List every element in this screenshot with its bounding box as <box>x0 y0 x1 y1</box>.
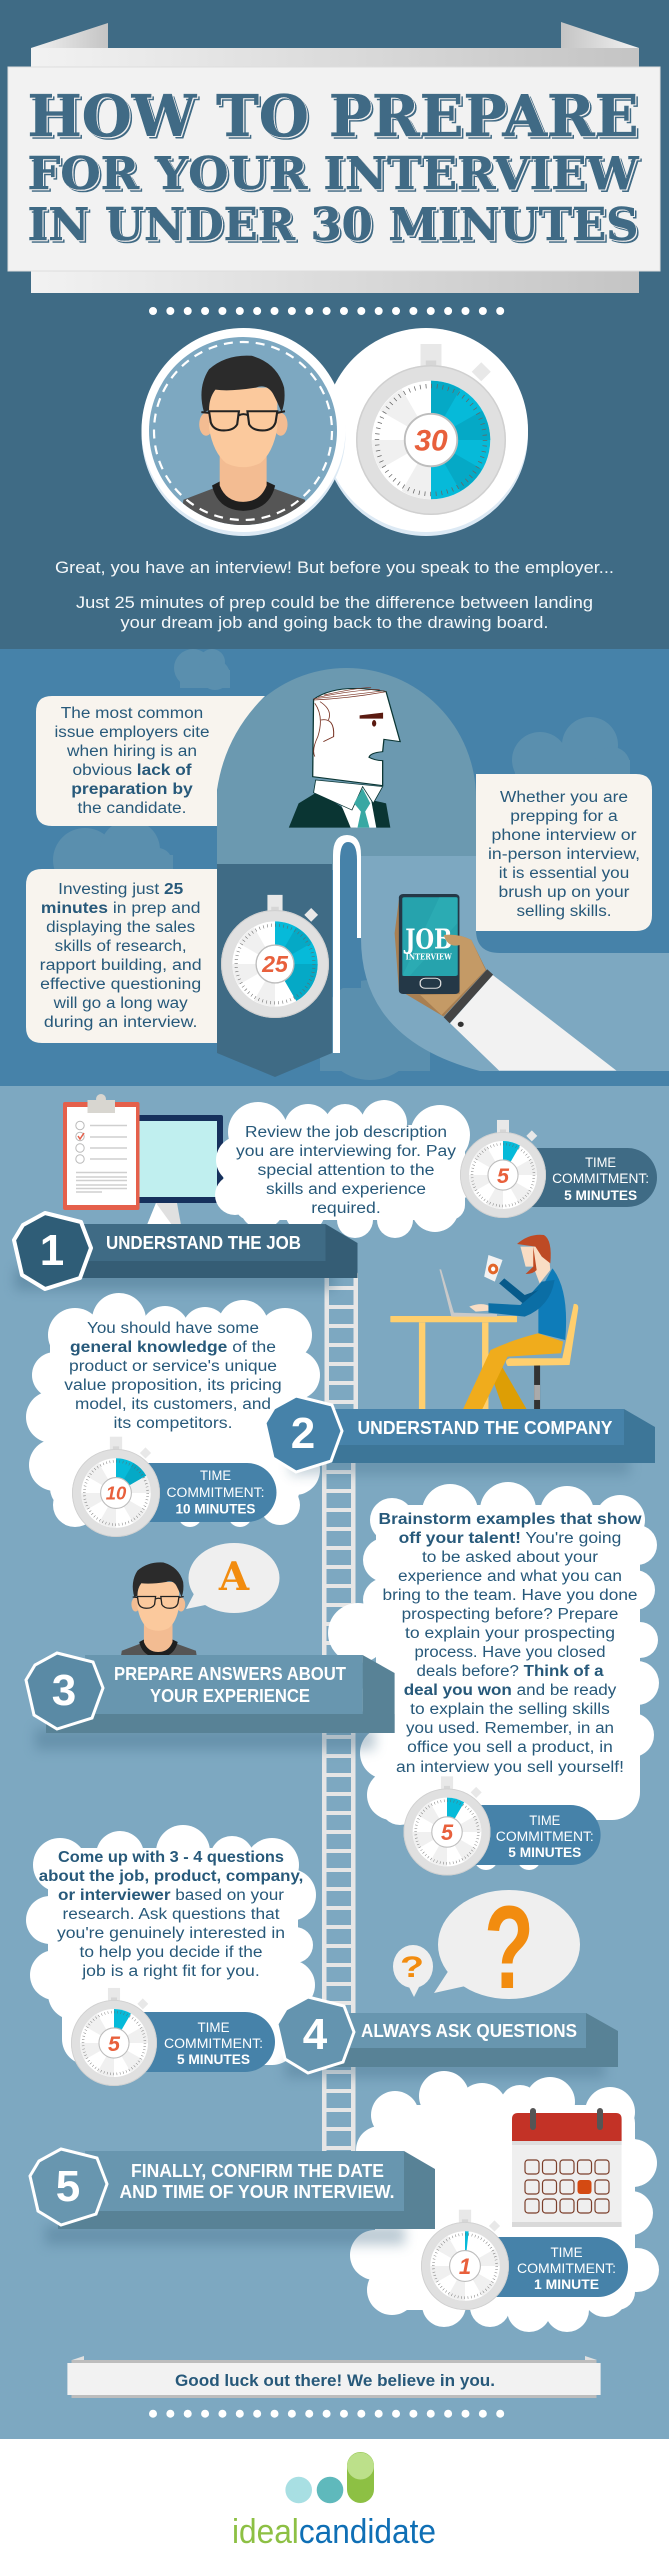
step 4 badge: 4 <box>303 2010 328 2059</box>
step 4 heading bar <box>277 1997 618 2078</box>
stopwatch: 5, step 3: 5 <box>441 1820 454 1845</box>
time pill: 5 minutes, step 1 <box>500 1148 657 1207</box>
step 2 badge: 2 <box>291 1409 315 1458</box>
text box: investing 25 minutes: skills of research, <box>55 938 187 955</box>
title banner <box>8 22 660 293</box>
text box: lack of preparation: obvious lack of <box>72 762 192 779</box>
step 1 badge: 1 <box>40 1226 64 1275</box>
top section background <box>0 0 669 649</box>
step 2 badge <box>265 1396 342 1472</box>
stopwatch: 10: 10 <box>106 1483 127 1504</box>
stopwatch: 30 <box>356 344 506 515</box>
step 3 description: an interview you sell yourself! <box>396 1759 624 1776</box>
step 4 description: about the job, product, company, <box>39 1868 303 1885</box>
stopwatch: 10 <box>72 1437 160 1537</box>
step 3 description: to explain the selling skills <box>410 1701 610 1718</box>
step 1 heading bar: UNDERSTAND THE JOB <box>106 1232 301 1253</box>
arch slot <box>333 835 361 1053</box>
step 2 description: You should have some <box>87 1320 259 1337</box>
intro text: Just 25 minutes of prep could be the difference between landing <box>76 593 593 612</box>
step 1 description: special attention to the <box>258 1162 434 1179</box>
icon: interviewer <box>289 687 400 828</box>
time pill: 10 minutes: 10 MINUTES <box>176 1502 256 1516</box>
icon: question speech bubbles: ? <box>400 1951 424 1984</box>
step 3 badge: 3 <box>52 1666 76 1715</box>
time pill: 5 minutes, step 3 <box>447 1805 601 1865</box>
portrait badge <box>142 328 346 536</box>
text box: lack of preparation <box>36 696 265 826</box>
middle section background <box>0 649 669 1086</box>
stopwatch: 5, step 4 <box>71 1988 157 2086</box>
icon: candidate answering <box>119 1543 280 1667</box>
step 4 description: you're genuinely interested in <box>57 1925 285 1942</box>
text box: selling skills <box>476 774 652 931</box>
step 3 badge <box>26 1653 103 1729</box>
logo: ideal candidate <box>232 2452 436 2551</box>
time pill: 5 minutes, step 3: COMMITMENT: <box>496 1829 594 1844</box>
dark ribbon panel <box>217 864 332 1077</box>
step 4 description: job is a right fit for you. <box>81 1963 260 1980</box>
step 3 description: to explain your prospecting <box>405 1625 615 1642</box>
step 1 description: you are interviewing for. Pay <box>236 1143 456 1160</box>
step 4 description <box>39 1849 303 1980</box>
footer background <box>0 2439 669 2561</box>
cloud: step 1 <box>215 1100 480 1238</box>
time pill: 1 minute <box>465 2237 628 2297</box>
text box: selling skills: it is essential you <box>499 865 629 882</box>
stopwatch badge: 30 minutes <box>324 328 528 536</box>
stopwatch: 5, step 4: 5 <box>108 2032 121 2056</box>
intro text <box>55 558 614 632</box>
time pill: 5 minutes, step 4: TIME <box>198 2020 230 2035</box>
time pill: 5 minutes, step 1: 5 MINUTES <box>564 1188 637 1203</box>
step 3 heading bar: YOUR EXPERIENCE <box>150 1685 310 1706</box>
time pill: 5 minutes, step 4: 5 MINUTES <box>177 2052 250 2067</box>
text box: investing 25 minutes: during an interview. <box>44 1014 197 1031</box>
step 3 description: deals before? Think of a <box>416 1663 604 1680</box>
step 3 description: prospecting before? Prepare <box>402 1606 618 1623</box>
step 4 description: or interviewer based on your <box>58 1887 284 1904</box>
ladder <box>322 1272 358 2152</box>
title text: IN UNDER 30 MINUTES <box>28 198 638 251</box>
step 3 description: to be asked about your <box>422 1549 598 1566</box>
time pill: 5 minutes, step 3: 5 MINUTES <box>508 1845 581 1860</box>
stopwatch: 25 <box>221 895 329 1018</box>
step 2 description: product or service's unique <box>69 1358 277 1375</box>
text box: investing 25 minutes: displaying the sales <box>46 919 195 936</box>
time pill: 10 minutes: TIME <box>200 1468 231 1483</box>
step 2 description: its competitors. <box>114 1415 232 1432</box>
text box: selling skills: selling skills. <box>516 903 612 920</box>
title text: HOW TO PREPARE <box>28 83 638 150</box>
title text <box>28 83 640 251</box>
step 1 description <box>236 1124 456 1217</box>
cloud: step 2 <box>26 1293 320 1527</box>
stopwatch: 30: 30 <box>414 424 448 457</box>
title text: FOR YOUR INTERVIEW <box>28 147 640 200</box>
text box: investing 25 minutes: Investing just 25 <box>58 881 184 898</box>
step 5 heading bar: FINALLY, CONFIRM THE DATE <box>131 2160 384 2181</box>
time pill: 5 minutes, step 1: COMMITMENT: <box>552 1171 649 1186</box>
closing banner: Good luck out there! We believe in you. <box>175 2372 495 2390</box>
stopwatch: 1 <box>421 2210 509 2310</box>
step 1 badge <box>14 1213 91 1289</box>
phone panel: light shape <box>361 856 669 1071</box>
text box: investing 25 minutes <box>26 869 217 1043</box>
step 3 description: process. Have you closed <box>414 1644 606 1661</box>
step 2 heading bar: UNDERSTAND THE COMPANY <box>358 1417 613 1438</box>
icon: man at desk with laptop <box>390 1235 578 1410</box>
time pill: 1 minute: 1 MINUTE <box>534 2277 599 2292</box>
step 3 description: Brainstorm examples that show <box>378 1511 643 1528</box>
job candidate portrait <box>179 356 309 526</box>
text box: investing 25 minutes: rapport building, and <box>40 957 202 974</box>
step 4 description: Come up with 3 - 4 questions <box>58 1849 284 1866</box>
step 3 description: office you sell a product, in <box>407 1739 613 1756</box>
step 2 description <box>64 1320 282 1432</box>
phone: INTERVIEW <box>406 952 452 962</box>
step 3 description: deal you won and be ready <box>404 1682 617 1699</box>
time pill: 10 minutes: COMMITMENT: <box>166 1485 264 1500</box>
text box: lack of preparation: the candidate. <box>78 800 186 817</box>
text box: selling skills: Whether you are <box>500 789 628 806</box>
step 5 heading bar <box>30 2149 435 2245</box>
step 3 description: bring to the team. Have you done <box>382 1587 638 1604</box>
text box: lack of preparation: when hiring is an <box>66 743 197 760</box>
phone <box>399 894 459 994</box>
faint background clouds <box>53 649 630 1080</box>
step 4 badge <box>277 1997 354 2073</box>
cloud: step 3 <box>328 1482 659 1870</box>
intro text: your dream job and going back to the drawing board. <box>120 613 548 632</box>
step 5 badge <box>30 2149 107 2225</box>
time pill: 5 minutes, step 3: TIME <box>529 1813 560 1828</box>
icon: question speech bubbles <box>393 1882 580 2014</box>
stopwatch: 1: 1 <box>459 2254 471 2279</box>
step 3 heading bar: PREPARE ANSWERS ABOUT <box>114 1663 347 1684</box>
step 2 description: model, its customers, and <box>75 1396 271 1413</box>
stopwatch: 5, step 1: 5 <box>497 1164 510 1188</box>
step 4 description: to help you decide if the <box>80 1944 262 1961</box>
steps section background <box>0 1086 669 2439</box>
text box: investing 25 minutes: minutes in prep and <box>41 900 200 917</box>
step 4 heading bar: ALWAYS ASK QUESTIONS <box>361 2020 577 2041</box>
stopwatch: 5, step 3 <box>404 1776 490 1876</box>
step 3 description <box>378 1511 643 1776</box>
time pill: 5 minutes, step 1: TIME <box>585 1155 616 1170</box>
text box: lack of preparation: preparation by <box>71 781 193 798</box>
time pill: 5 minutes, step 4: COMMITMENT: <box>164 2036 263 2051</box>
time pill: 10 minutes <box>116 1463 276 1522</box>
closing banner <box>67 2356 601 2398</box>
text box: selling skills: prepping for a <box>510 808 618 825</box>
icon: hand holding phone <box>395 894 616 1071</box>
text box: investing 25 minutes: effective questioning <box>40 976 201 993</box>
step 3 heading bar <box>26 1653 395 1750</box>
text box: lack of preparation: The most common <box>61 705 203 722</box>
phone: JOB <box>403 924 452 955</box>
text box: selling skills: in-person interview, <box>488 846 640 863</box>
icon: calendar <box>512 2108 622 2227</box>
time pill: 5 minutes, step 4 <box>114 2012 275 2072</box>
interview panel: arch <box>217 668 476 870</box>
text box: lack of preparation: issue employers cite <box>54 724 210 741</box>
step 2 description: value proposition, its pricing <box>64 1377 282 1394</box>
time pill: 1 minute: COMMITMENT: <box>517 2261 616 2276</box>
step 1 description: required. <box>311 1200 381 1217</box>
step 3 description: experience and what you can <box>398 1568 622 1585</box>
text box: selling skills: phone interview or <box>492 827 636 844</box>
icon: clipboard and monitor <box>63 1094 223 1228</box>
step 1 description: skills and experience <box>266 1181 426 1198</box>
speech bubble: A <box>186 1543 280 1613</box>
stopwatch: 25: 25 <box>261 951 289 977</box>
text box: selling skills: brush up on your <box>498 884 630 901</box>
step 5 heading bar: AND TIME OF YOUR INTERVIEW. <box>120 2181 394 2202</box>
step 2 description: general knowledge of the <box>70 1339 276 1356</box>
step 1 description: Review the job description <box>245 1124 447 1141</box>
text box: investing 25 minutes: will go a long way <box>53 995 188 1012</box>
speech bubble: A: A <box>218 1554 250 1600</box>
logo: ideal candidate: idealcandidate <box>232 2513 436 2551</box>
icon: question speech bubbles: ? <box>484 1882 534 2014</box>
step 1 heading bar <box>14 1213 358 1290</box>
time pill: 1 minute: TIME <box>550 2245 582 2260</box>
cloud: step 5 <box>350 2071 659 2332</box>
step 4 description: research. Ask questions that <box>62 1906 280 1923</box>
step 5 badge: 5 <box>56 2162 80 2211</box>
step 3 description: off your talent! You're going <box>399 1530 621 1547</box>
step 3 description: you used. Remember, in an <box>406 1720 614 1737</box>
intro text: Great, you have an interview! But before you speak to the employer... <box>55 558 614 577</box>
step 2 heading bar <box>265 1396 655 1475</box>
stopwatch: 5, step 1 <box>460 1120 546 1218</box>
cloud: step 4 <box>26 1825 316 2065</box>
